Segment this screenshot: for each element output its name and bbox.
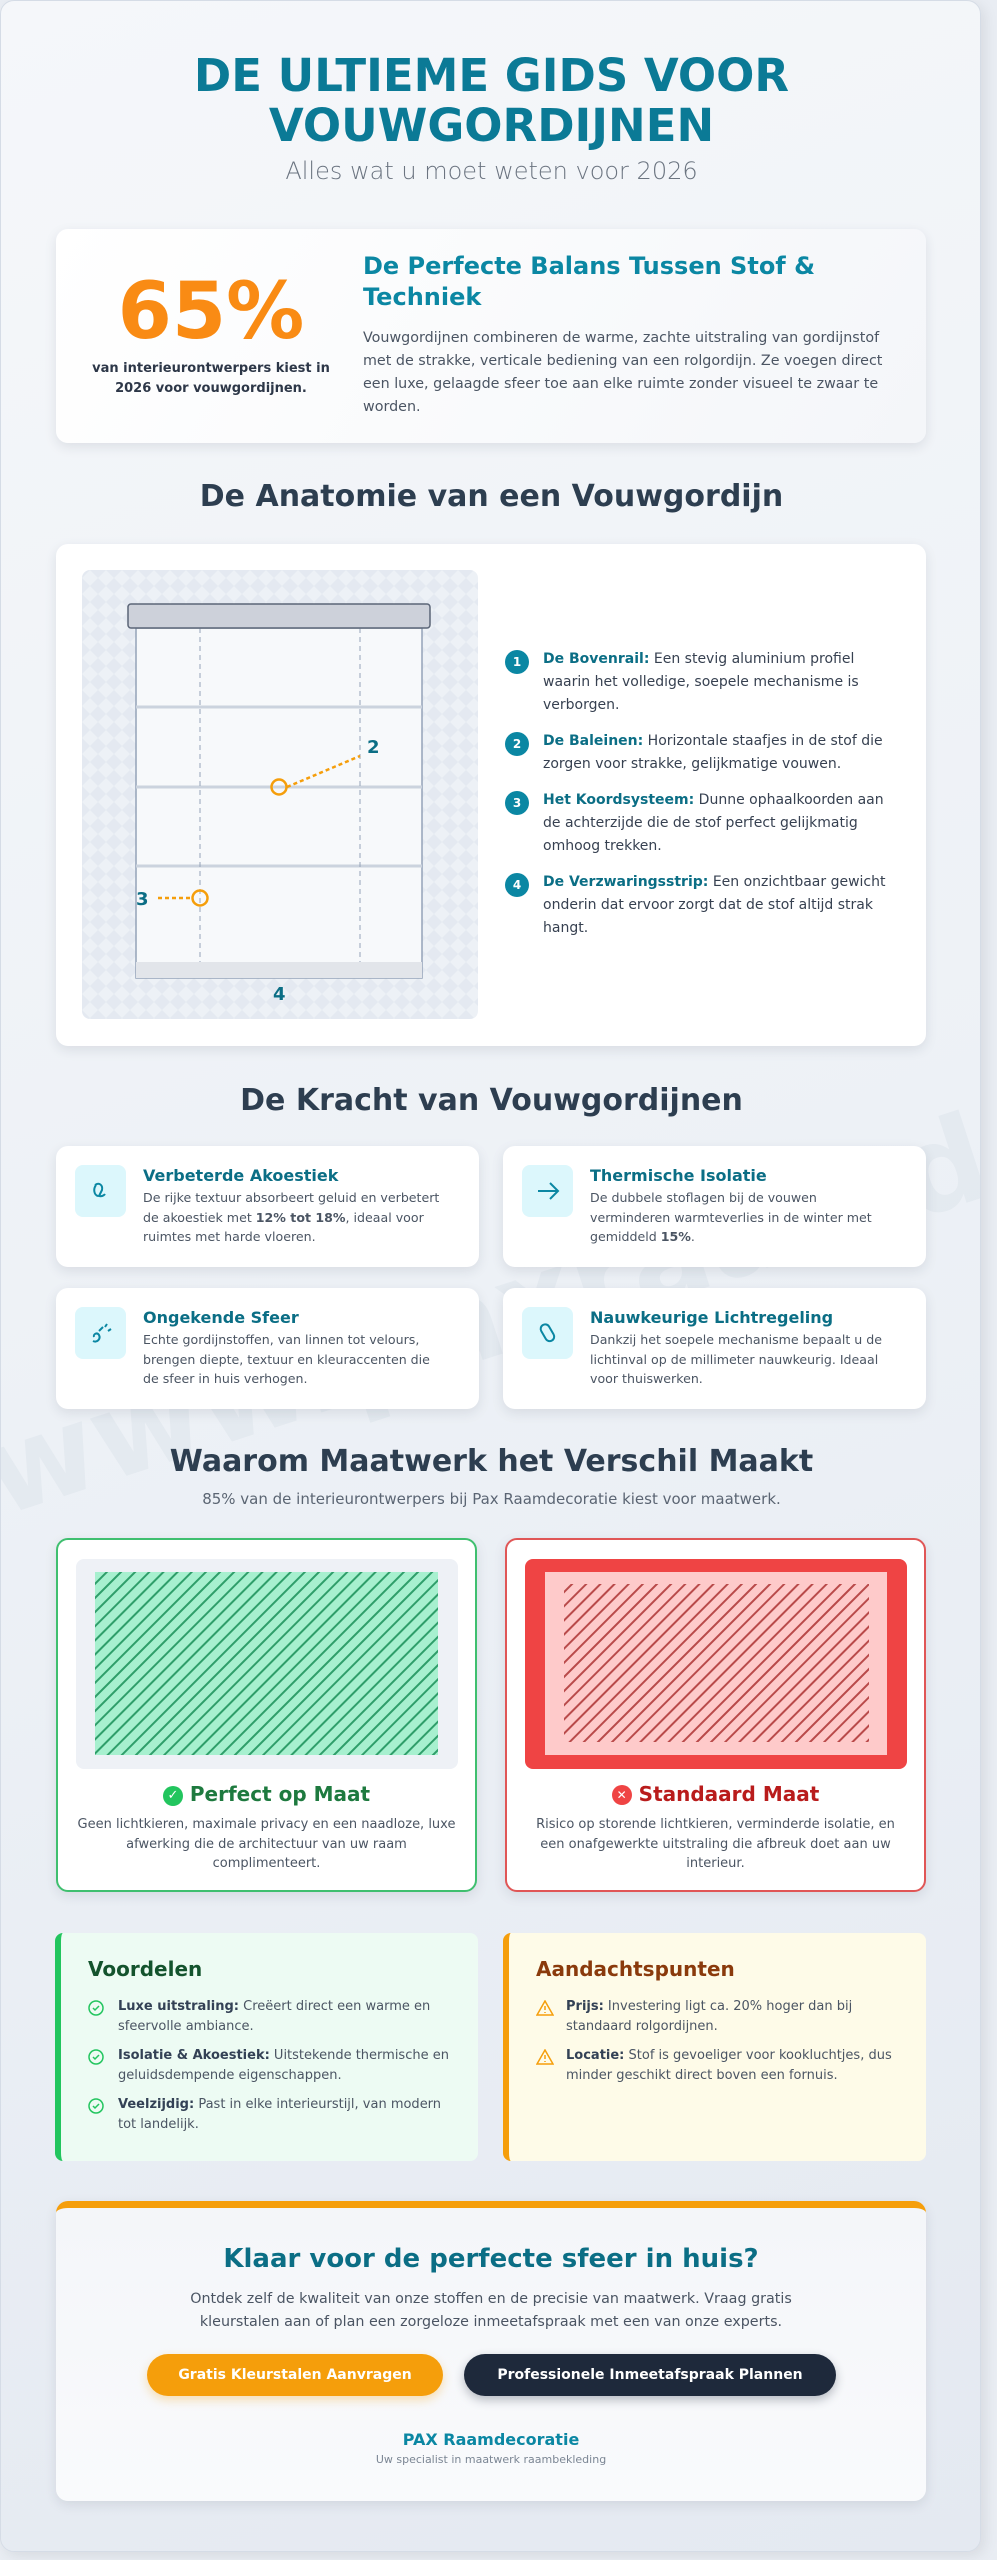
- panel: aandachtspunten: [503, 1933, 926, 2161]
- benefit: licht: Dankzij het soepele mechanisme bepaalt u de lichtinval op de millimeter nauwkeurig. Ideaal voor thuiswerken.: [590, 1332, 882, 1386]
- anatomy panel: [56, 544, 926, 1046]
- benefit: licht: [503, 1288, 926, 1409]
- list voordelen: Isolatie & Akoestiek: Uitstekende thermische en geluidsdempende eigenschappen.: [118, 2048, 449, 2083]
- panel: voordelen: [55, 1933, 478, 2161]
- title perfect: ✓: [167, 1788, 178, 1803]
- benefit: isolatie: [503, 1146, 926, 1267]
- list item 4: De Verzwaringsstrip: Een onzichtbaar gewicht onderin dat ervoor zorgt dat de stof altijd strak hangt.: [543, 874, 886, 936]
- list item 3: 3: [513, 796, 521, 810]
- list item 2: 2: [513, 737, 521, 751]
- title: DE ULTIEME GIDS VOOR: [194, 49, 789, 102]
- benefit: isolatie: Thermische Isolatie: [590, 1166, 767, 1185]
- CTA text: Ontdek zelf de kwaliteit van onze stoffen en de precisie van maatwerk. Vraag gratis kleurstalen aan of plan een zorgeloze inmeetafspraak met een van onze experts.: [190, 2291, 792, 2330]
- button: inmeetafspraak: [464, 2354, 836, 2396]
- heading voordelen: Voordelen: [88, 1957, 202, 1981]
- list voordelen: Luxe uitstraling: Creëert direct een warme en sfeervolle ambiance.: [118, 1999, 430, 2034]
- benefit: akoestiek: [56, 1146, 479, 1267]
- title perfect: Perfect op Maat: [190, 1782, 370, 1806]
- compare: perfect: [56, 1538, 477, 1892]
- icon: pill: [522, 1307, 573, 1359]
- benefit: akoestiek: Verbeterde Akoestiek: [143, 1166, 338, 1185]
- heading: kracht: De Kracht van Vouwgordijnen: [240, 1083, 743, 1118]
- title standaard: ✕: [617, 1788, 627, 1802]
- list item 1: De Bovenrail: Een stevig aluminium profiel waarin het volledige, soepele mechanisme is verborgen.: [543, 651, 859, 713]
- benefit: sfeer: Ongekende Sfeer: [143, 1308, 299, 1327]
- list voordelen: [88, 1999, 449, 2132]
- stat caption: van interieurontwerpers kiest in 2026 voor vouwgordijnen.: [92, 361, 330, 396]
- benefit: sfeer: Echte gordijnstoffen, van linnen tot velours, brengen diepte, textuur en kleuraccenten die de sfeer in huis verhogen.: [143, 1332, 430, 1386]
- button: kleurstalen: Gratis Kleurstalen Aanvragen: [178, 2367, 412, 2383]
- diagram: 3: [136, 889, 149, 910]
- diagram: [82, 570, 478, 1019]
- CTA heading: Klaar voor de perfecte sfeer in huis?: [223, 2244, 759, 2274]
- stat card: [56, 229, 926, 443]
- list voordelen: Veelzijdig: Past in elke interieurstijl, van modern tot landelijk.: [118, 2097, 441, 2132]
- desc perfect: Geen lichtkieren, maximale privacy en een naadloze, luxe afwerking die de architectuur van uw raam complimenteert.: [78, 1817, 455, 1871]
- benefit: sfeer: [56, 1288, 479, 1409]
- tagline: Uw specialist in maatwerk raambekleding: [376, 2453, 606, 2466]
- list aandachtspunten: Locatie: Stof is gevoeliger voor kookluchtjes, dus minder geschikt direct boven een fornuis.: [566, 2048, 892, 2083]
- compare: standaard: [505, 1538, 926, 1892]
- heading: anatomie: De Anatomie van een Vouwgordijn: [200, 479, 783, 514]
- benefit: licht: Nauwkeurige Lichtregeling: [590, 1308, 833, 1327]
- illustration: fit: [76, 1559, 458, 1769]
- button: inmeetafspraak: Professionele Inmeetafspraak Plannen: [497, 2367, 803, 2383]
- list aandachtspunten: Prijs: Investering ligt ca. 20% hoger dan bij standaard rolgordijnen.: [566, 1999, 852, 2034]
- list item 2: De Baleinen: Horizontale staafjes in de stof die zorgen voor strakke, gelijkmatige vouwen.: [543, 733, 883, 772]
- title standaard: Standaard Maat: [639, 1782, 819, 1806]
- button: kleurstalen: [147, 2354, 443, 2396]
- heading aandachtspunten: Aandachtspunten: [536, 1957, 735, 1981]
- benefit: akoestiek: De rijke textuur absorbeert geluid en verbetert de akoestiek met 12% tot 18%, ideaal voor ruimtes met harde vloeren.: [143, 1190, 439, 1244]
- subtitle: Alles wat u moet weten voor 2026: [285, 157, 698, 185]
- intro heading: De Perfecte Balans Tussen Stof & Techniek: [363, 252, 815, 311]
- subheading: 85% van de interieurontwerpers bij Pax Raamdecoratie kiest voor maatwerk.: [202, 1490, 781, 1508]
- intro text: Vouwgordijnen combineren de warme, zachte uitstraling van gordijnstof met de strakke, verticale bediening van een rolgordijn. Ze voegen direct een luxe, gelaagde sfeer toe aan elke ruimte zonder visueel te zwaar te worden.: [363, 330, 882, 415]
- diagram: 4: [273, 984, 286, 1005]
- title: [194, 49, 789, 152]
- illustration: gap: [525, 1559, 907, 1769]
- CTA panel: [56, 2201, 926, 2501]
- title: VOUWGORDIJNEN: [269, 99, 714, 152]
- benefit: isolatie: De dubbele stoflagen bij de vouwen verminderen warmteverlies in de winter met gemiddeld 15%.: [590, 1190, 872, 1244]
- heading: maatwerk: Waarom Maatwerk het Verschil Maakt: [170, 1444, 813, 1479]
- list item 4: 4: [513, 878, 521, 892]
- list item 3: Het Koordsysteem: Dunne ophaalkoorden aan de achterzijde die de stof perfect gelijkmatig omhoog trekken.: [543, 792, 884, 854]
- icon: sound: [75, 1165, 126, 1217]
- diagram: 2: [367, 737, 380, 758]
- list aandachtspunten: [536, 1999, 892, 2083]
- list item 1: 1: [513, 655, 521, 669]
- desc standaard: Risico op storende lichtkieren, verminderde isolatie, en een onafgewerkte uitstraling die afbreuk doet aan uw interieur.: [536, 1817, 895, 1871]
- stat number: 65%: [118, 267, 304, 357]
- brand: PAX Raamdecoratie: [403, 2430, 579, 2449]
- icon: sparkle: [75, 1307, 126, 1359]
- icon: arrow: [522, 1165, 573, 1217]
